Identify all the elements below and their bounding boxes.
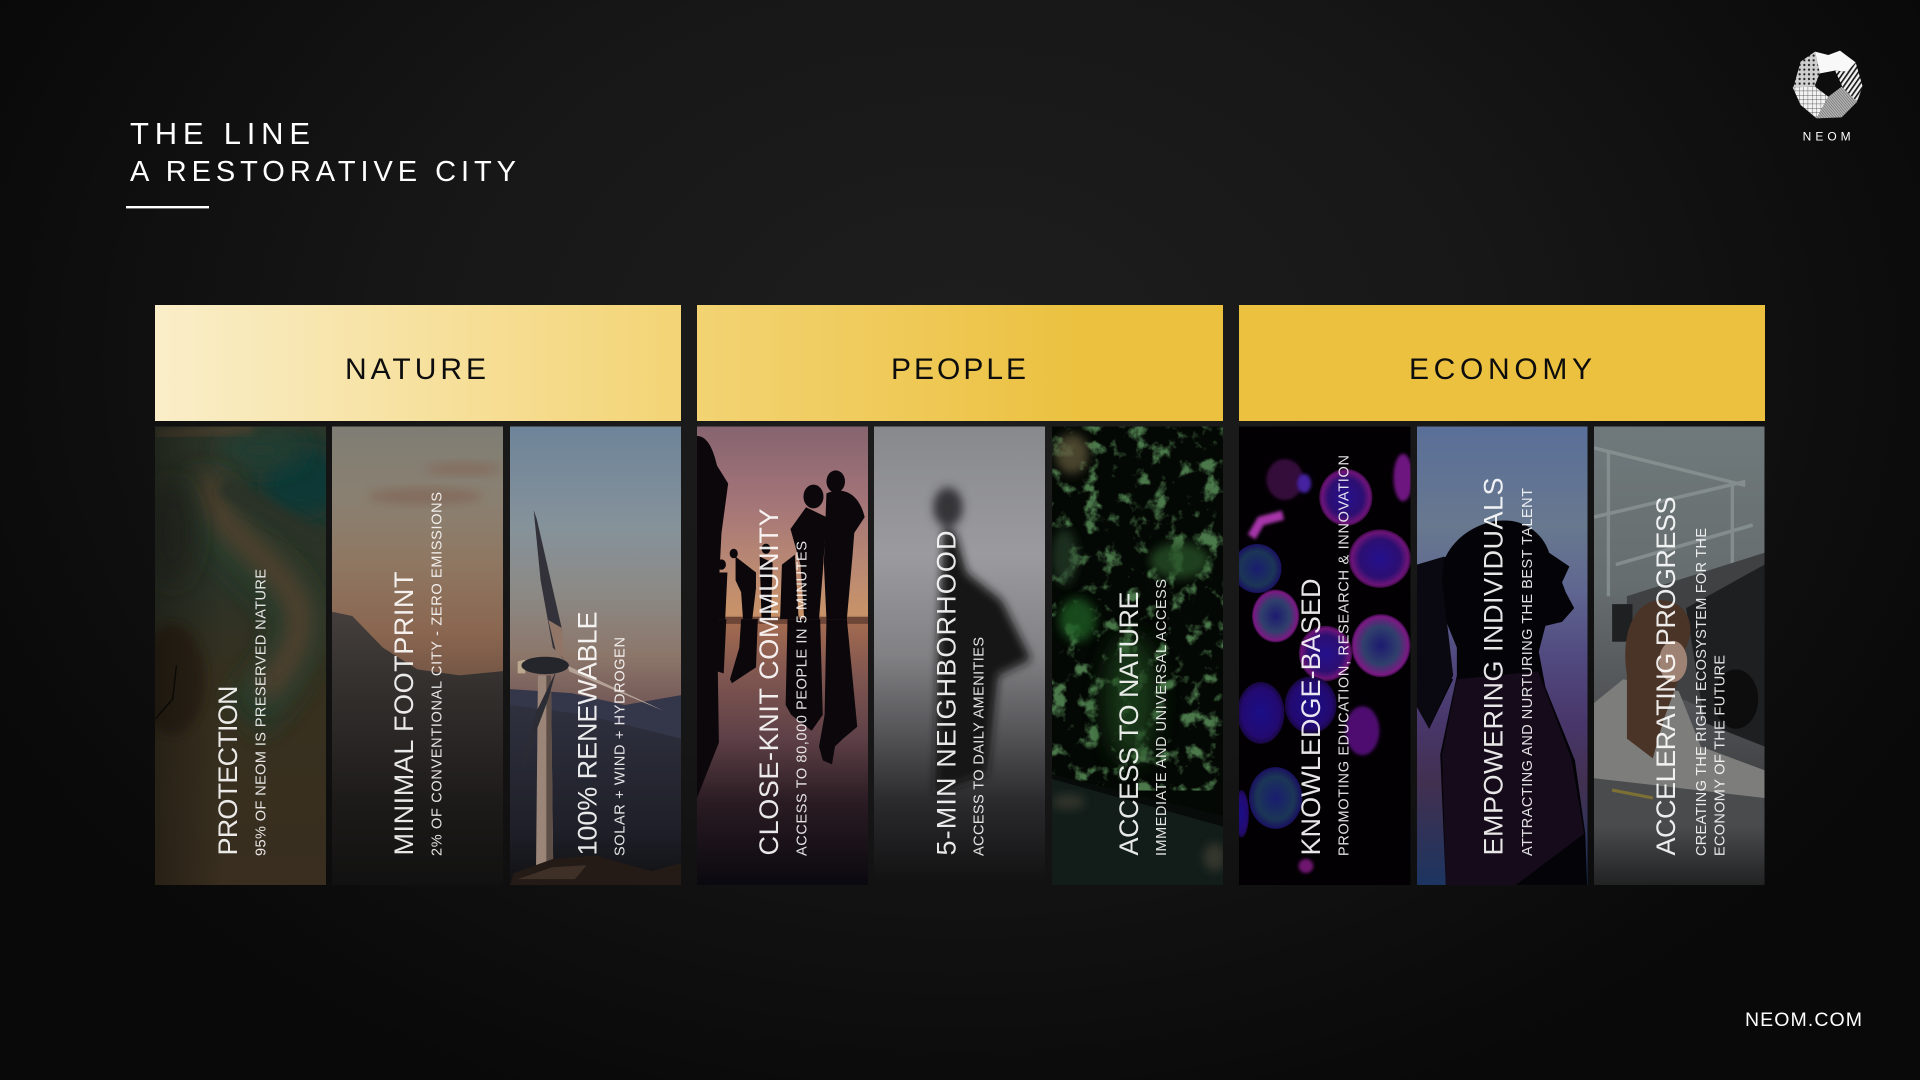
heading: economy: [1239, 305, 1765, 421]
label: accelerating progress: CREATING THE RIGHT ECOSYSTEM FOR THE: [1694, 528, 1710, 856]
label: protection: [213, 569, 270, 856]
label: protection: 95% OF NEOM IS PRESERVED NATURE: [254, 569, 270, 856]
heading: nature: NATURE: [345, 353, 486, 386]
heading: economy: ECONOMY: [1409, 353, 1592, 386]
label: protection: PROTECTION: [213, 686, 243, 856]
label: 5-min neighborhood: [931, 530, 987, 856]
label: knowledge-based: KNOWLEDGE-BASED: [1296, 578, 1326, 856]
label: close-knit community: CLOSE-KNIT COMMUNITY: [754, 508, 784, 856]
label: 100% renewable: [572, 612, 628, 856]
label: minimal footprint: [389, 492, 445, 856]
label: access to nature: ACCESS TO NATURE: [1114, 592, 1144, 856]
label: 5-min neighborhood: 5-MIN NEIGHBORHOOD: [931, 530, 961, 856]
logo: NEOM: [1793, 51, 1863, 144]
label: accelerating progress: ACCELERATING PROGRESS: [1651, 496, 1681, 856]
title: [130, 116, 516, 188]
label: 5-min neighborhood: ACCESS TO DAILY AMENITIES: [971, 637, 987, 856]
heading: people: [697, 305, 1223, 421]
panel: economy: [1233, 305, 1765, 885]
label: minimal footprint: MINIMAL FOOTPRINT: [389, 572, 419, 856]
card: protection: [140, 426, 349, 885]
card: close-knit community: [697, 426, 868, 885]
card: empowering individuals: [1417, 426, 1588, 885]
label: 100% renewable: 100% RENEWABLE: [572, 612, 602, 856]
card: 5-min neighborhood: [874, 426, 1045, 885]
footer link: NEOM.COM: [1745, 1009, 1862, 1031]
panel: nature: [140, 305, 681, 913]
label: close-knit community: [754, 508, 810, 856]
panel: people: [697, 305, 1226, 885]
heading: people: PEOPLE: [891, 353, 1026, 386]
label: accelerating progress: [1651, 496, 1729, 856]
label: empowering individuals: ATTRACTING AND NURTURING THE BEST TALENT: [1520, 488, 1536, 856]
label: close-knit community: ACCESS TO 80,000 PEOPLE IN 5 MINUTES: [794, 541, 810, 856]
card: minimal footprint: [314, 426, 521, 913]
title: THE LINE: [130, 116, 310, 151]
card: 100% renewable: [510, 426, 681, 885]
label: empowering individuals: [1479, 478, 1536, 856]
label: minimal footprint: 2% OF CONVENTIONAL CITY - ZERO EMISSIONS: [429, 492, 445, 856]
label: access to nature: [1114, 579, 1170, 856]
card: access to nature: [1052, 426, 1226, 885]
card: accelerating progress: [1594, 426, 1764, 885]
title: A RESTORATIVE CITY: [130, 156, 516, 188]
label: access to nature: IMMEDIATE AND UNIVERSAL ACCESS: [1154, 579, 1170, 856]
label: accelerating progress: ECONOMY OF THE FUTURE: [1713, 655, 1729, 856]
label: 100% renewable: SOLAR + WIND + HYDROGEN: [612, 637, 628, 856]
heading: nature: [155, 305, 681, 421]
logo: NEOM: NEOM: [1803, 130, 1851, 144]
label: knowledge-based: [1296, 455, 1353, 856]
label: empowering individuals: EMPOWERING INDIVIDUALS: [1479, 478, 1509, 856]
card: knowledge-based: [1233, 426, 1413, 885]
label: knowledge-based: PROMOTING EDUCATION, RESEARCH & INNOVATION: [1337, 455, 1353, 856]
